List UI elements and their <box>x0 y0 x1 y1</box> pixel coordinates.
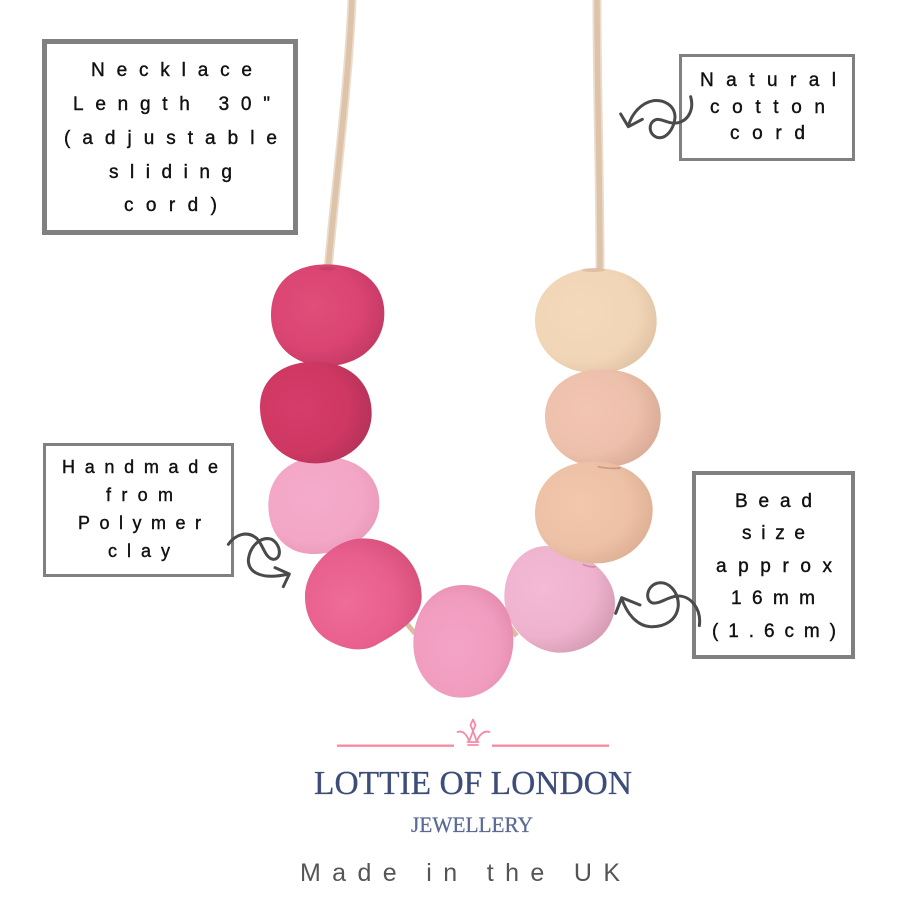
callout: necklace length: Length 30" <box>73 94 270 115</box>
necklace beads <box>260 264 661 698</box>
callout: bead size: size <box>742 523 805 544</box>
cord: left strand <box>328 0 352 270</box>
callout: necklace length: cord) <box>124 195 217 216</box>
callout: necklace length: Necklace <box>91 60 252 81</box>
callout: bead size: (1.6cm) <box>712 621 836 642</box>
callout: handmade from polymer clay: clay <box>108 541 170 561</box>
callout: natural cotton cord: cotton <box>710 97 825 118</box>
callout: natural cotton cord <box>680 56 854 160</box>
callout: natural cotton cord: Natural <box>700 70 836 91</box>
callout: handmade from polymer clay: Handmade <box>62 457 218 477</box>
logo: jewellery: JEWELLERY <box>411 812 533 837</box>
callout: bead size: approx <box>716 556 832 577</box>
callout: handmade from polymer clay: Polymer <box>78 513 201 533</box>
callout: natural cotton cord: cord <box>730 123 805 144</box>
callout: necklace length: sliding <box>109 162 232 183</box>
callout: bead size: Bead <box>735 491 812 512</box>
logo: crown with rules <box>337 720 609 746</box>
arrow: to cotton cord <box>621 97 692 138</box>
callout: handmade from polymer clay: from <box>106 485 173 505</box>
arrow: to bead <box>228 534 289 587</box>
tagline: made in the UK: Made in the UK <box>300 859 620 887</box>
callout: handmade from polymer clay <box>44 444 232 576</box>
callout: bead size: 16mm <box>731 588 815 609</box>
logo: brand name: LOTTIE OF LONDON <box>314 765 632 802</box>
callout: necklace length: (adjustable <box>64 128 277 149</box>
callout: bead size <box>694 473 853 657</box>
callout: necklace length <box>44 42 296 232</box>
cord: right strand <box>597 0 600 270</box>
arrow: to bead size <box>616 583 700 627</box>
